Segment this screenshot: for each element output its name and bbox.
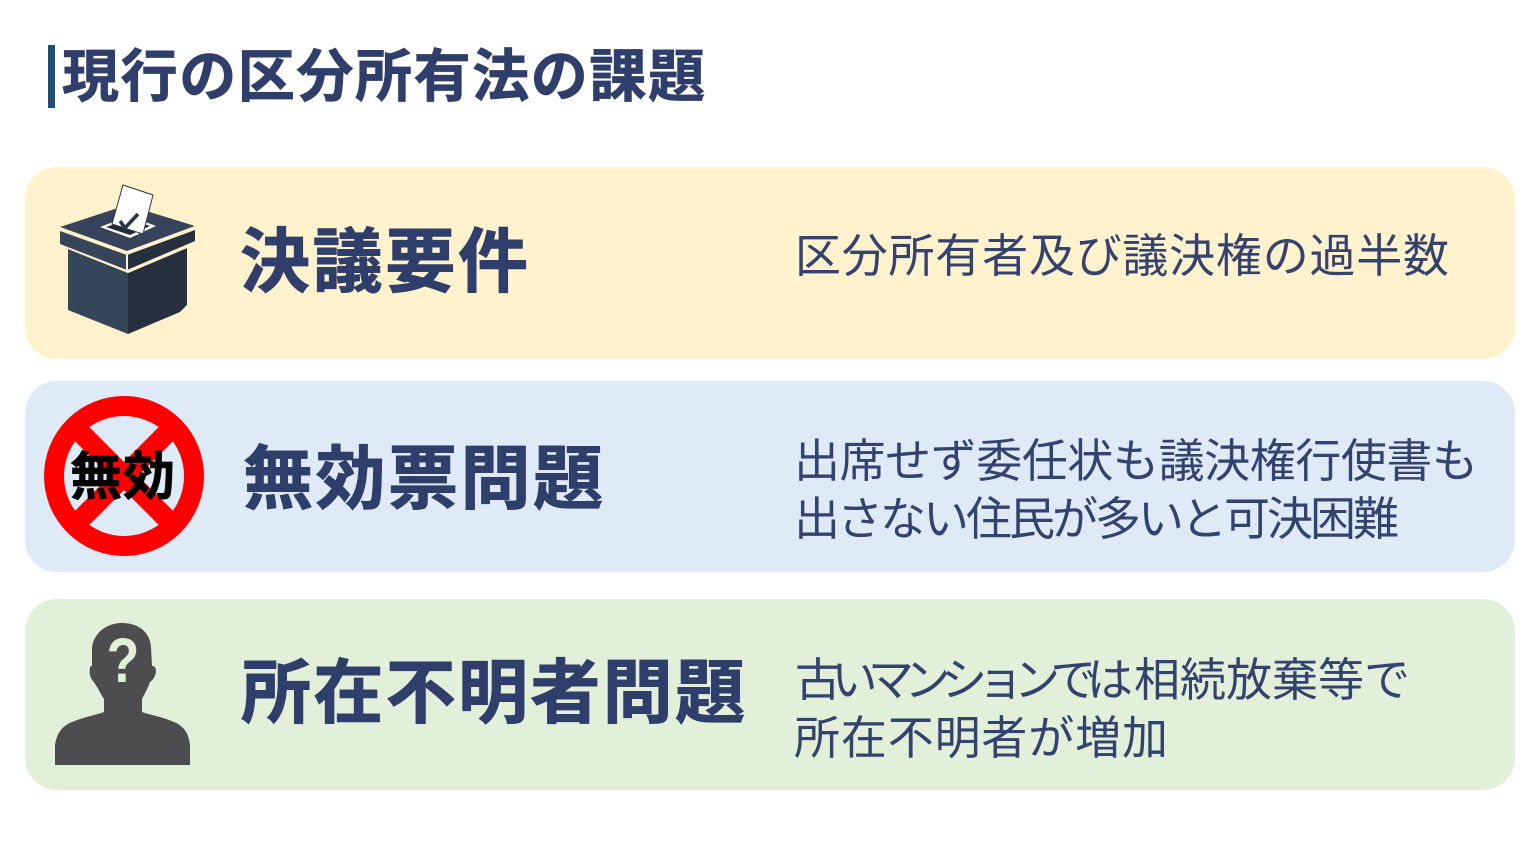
panel: 無効票問題 [25, 381, 1515, 572]
panel: 決議要件 [25, 167, 1515, 359]
description [794, 654, 1410, 764]
description: 出さない住民が多いと可決困難 [794, 493, 1399, 545]
icon: person with question mark: ? [107, 626, 139, 696]
description: 所在不明者が増加 [794, 712, 1168, 764]
description: 区分所有者及び議決権の過半数 [795, 230, 1449, 282]
icon: no-entry sign with 無効 [54, 406, 194, 546]
icon: no-entry sign with 無効: 無効 [70, 449, 175, 507]
description: 古いマンションでは [795, 654, 1133, 706]
heading: 決議要件 [240, 223, 528, 301]
heading: 無効票問題 [243, 440, 603, 518]
title: 現行の区分所有法の課題 [62, 45, 705, 109]
description: 出席せず委任状も議決権行使書も [794, 435, 1478, 487]
heading: 所在不明者問題 [241, 654, 745, 732]
panel: 所在不明者問題 [25, 599, 1515, 790]
icon: person with question mark [55, 623, 190, 765]
description: 相続放棄等で [1134, 654, 1410, 706]
description [794, 435, 1478, 545]
icon: ballot box [60, 185, 195, 334]
